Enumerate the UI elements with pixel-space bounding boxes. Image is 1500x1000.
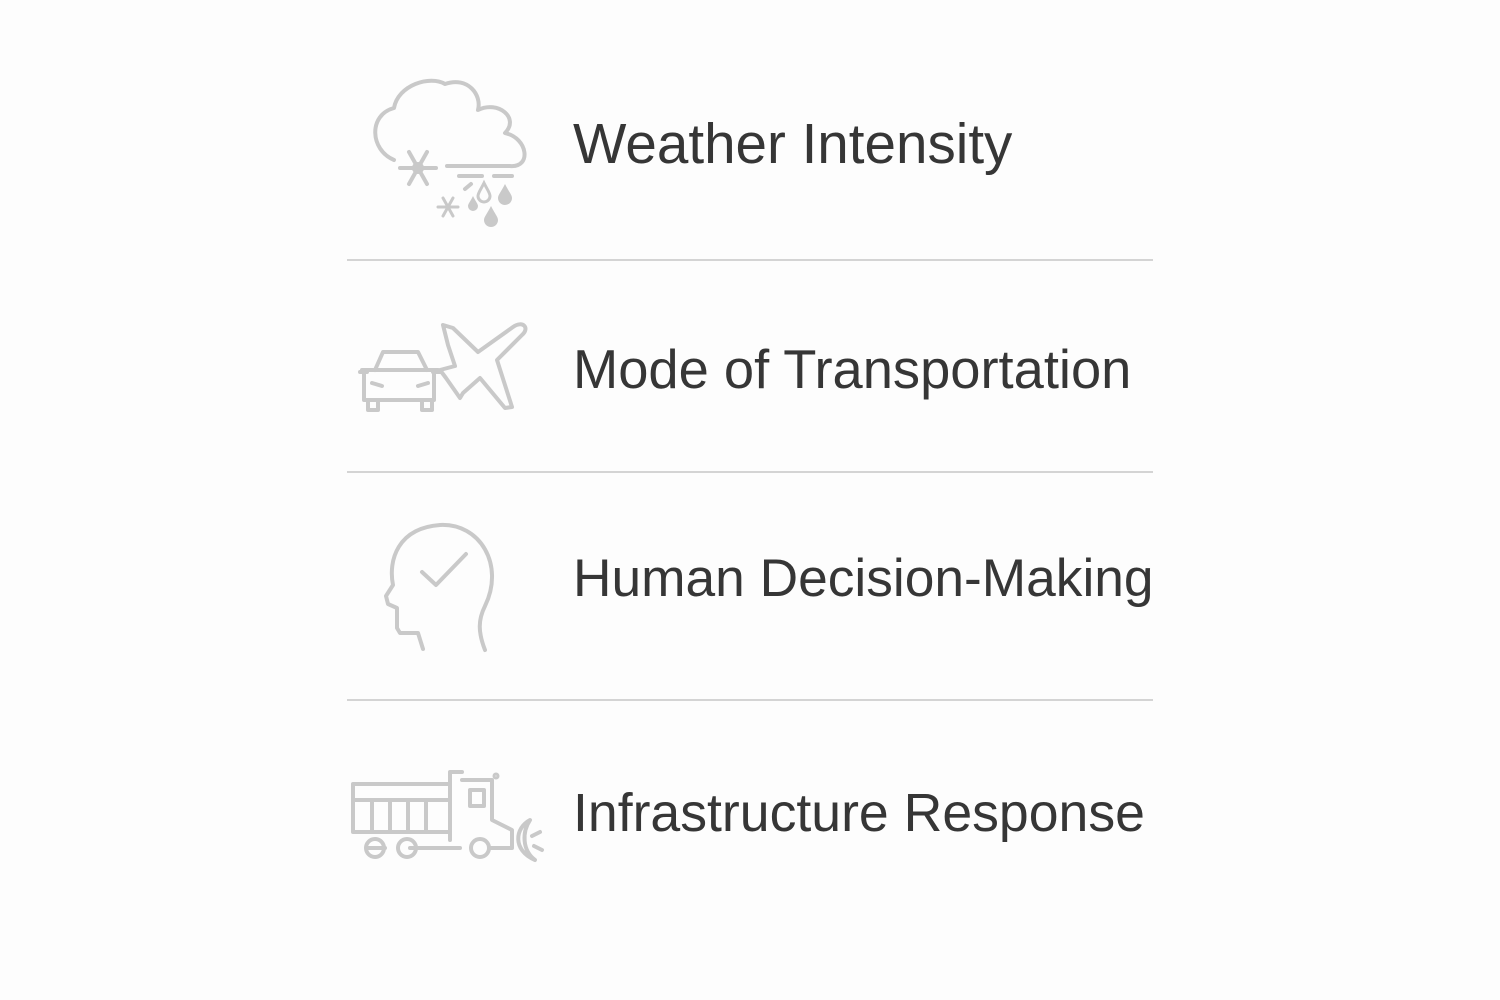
title: Mode of Transportation: Mode of Transportation bbox=[573, 339, 1131, 400]
title: Infrastructure Response: Infrastructure Response bbox=[573, 783, 1145, 843]
title: Weather Intensity: Weather Intensity bbox=[573, 112, 1012, 175]
title: Human Decision-Making: Human Decision-Making bbox=[573, 549, 1154, 608]
